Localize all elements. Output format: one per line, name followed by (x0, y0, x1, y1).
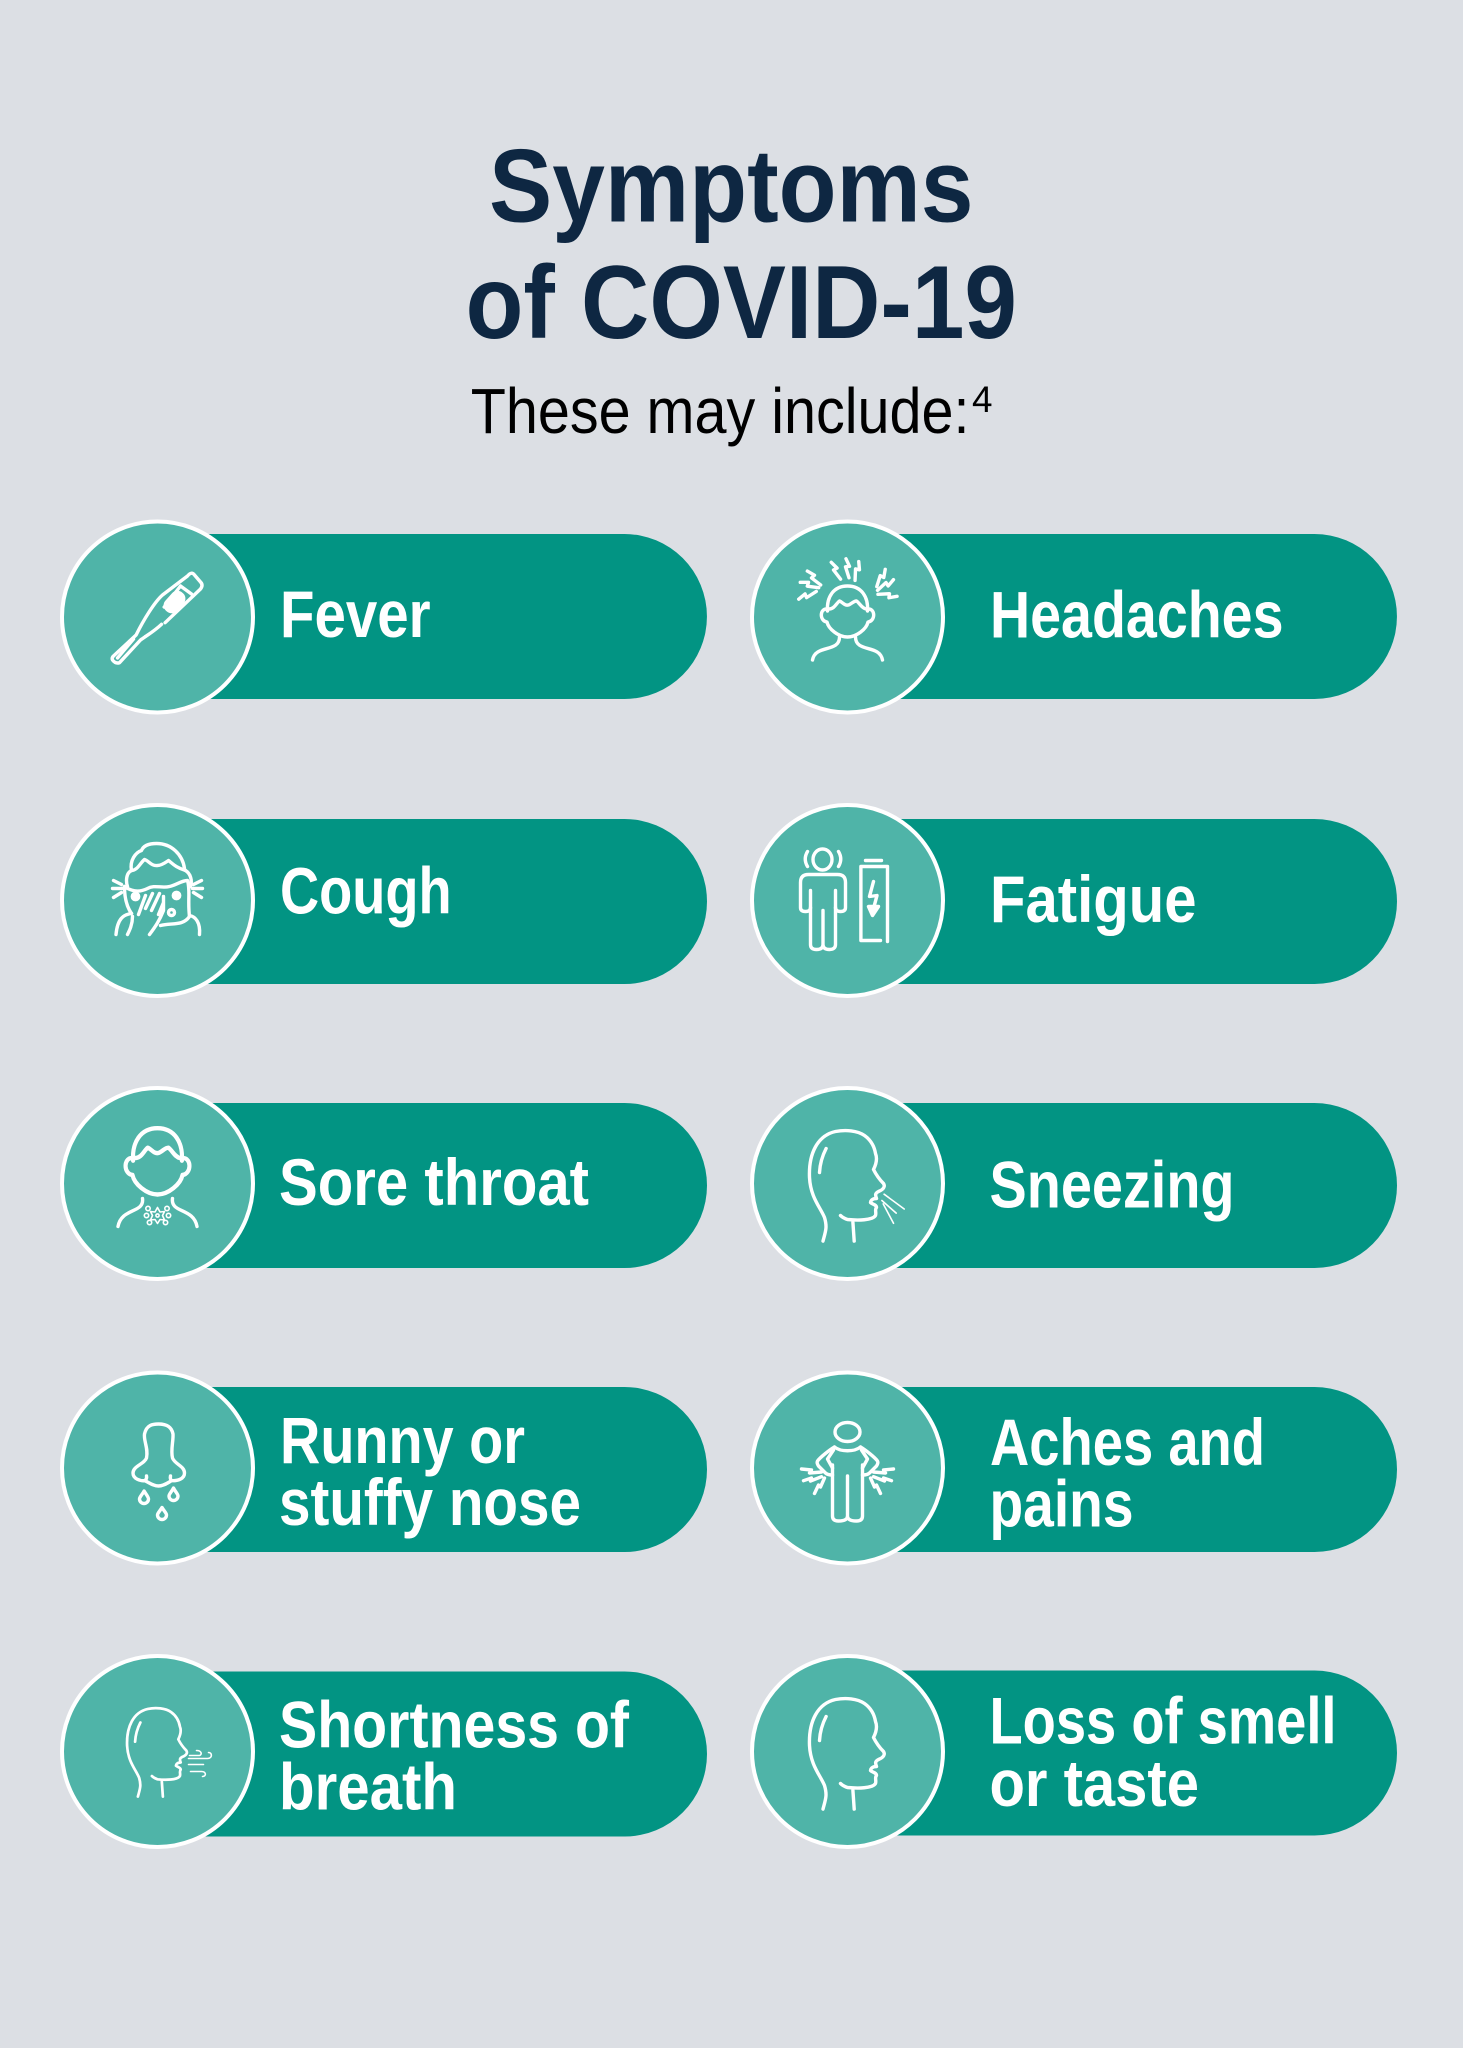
panel: cough (62, 805, 707, 996)
label: or taste (990, 1746, 1199, 1820)
icon: head with pain bolts (798, 559, 897, 660)
icon circle (752, 805, 943, 996)
label (990, 1405, 1265, 1540)
label: Aches and (990, 1405, 1265, 1479)
label: Runny or (280, 1403, 525, 1477)
icon circle (62, 805, 253, 996)
icon: thermometer (112, 573, 202, 663)
icon circle (752, 522, 943, 712)
pill (200, 1387, 707, 1552)
label: Fever (280, 577, 431, 651)
icon circle (62, 522, 253, 712)
label: Loss of smell (990, 1684, 1336, 1758)
icon circle (62, 1372, 253, 1564)
pill (890, 819, 1397, 984)
label: Headaches (990, 578, 1284, 652)
pill (890, 1103, 1397, 1268)
subtitle: These may include: (471, 375, 970, 447)
icon circle (752, 1088, 943, 1279)
pill (890, 534, 1397, 699)
label: pains (990, 1466, 1134, 1540)
label: Sore throat (279, 1145, 589, 1219)
panel: loss of smell or taste (752, 1656, 1397, 1847)
icon: person with sore throat (118, 1128, 197, 1226)
icon circle (62, 1656, 253, 1847)
title (466, 129, 1017, 361)
subtitle: 4 (972, 379, 992, 420)
panel: sneezing (752, 1088, 1397, 1279)
icon: tired person and low battery (800, 849, 888, 950)
panel: sore throat (62, 1088, 707, 1279)
panel: fatigue (752, 805, 1397, 996)
pill (890, 1670, 1397, 1836)
label: Cough (280, 854, 452, 928)
icon circle (752, 1372, 943, 1564)
label: Sneezing (990, 1148, 1234, 1222)
label: Shortness of (279, 1688, 630, 1762)
pill (200, 534, 707, 699)
icon: coughing person (112, 844, 202, 934)
icon: runny nose (133, 1424, 184, 1520)
pill (200, 1672, 707, 1836)
label (990, 1684, 1336, 1820)
pill (890, 1387, 1397, 1552)
panel: shortness of breath (62, 1656, 707, 1847)
icon: head breathing out (127, 1708, 211, 1797)
label: breath (279, 1750, 457, 1824)
label (279, 1688, 630, 1824)
pill (200, 1103, 707, 1268)
pill (200, 819, 707, 984)
panel: headaches (752, 522, 1397, 712)
icon: head sneezing (809, 1131, 904, 1241)
icon: head in profile (809, 1699, 884, 1809)
label (279, 1403, 581, 1539)
panel: aches and pains (752, 1372, 1397, 1564)
label: Fatigue (990, 862, 1196, 936)
icon: person with body aches (802, 1422, 894, 1521)
label: stuffy nose (279, 1465, 581, 1539)
icon circle (62, 1088, 253, 1279)
panel: runny or stuffy nose (62, 1372, 707, 1564)
title: of COVID-19 (466, 245, 1017, 361)
icon circle (752, 1656, 943, 1847)
panel: fever (62, 522, 707, 712)
title: Symptoms (489, 129, 974, 245)
